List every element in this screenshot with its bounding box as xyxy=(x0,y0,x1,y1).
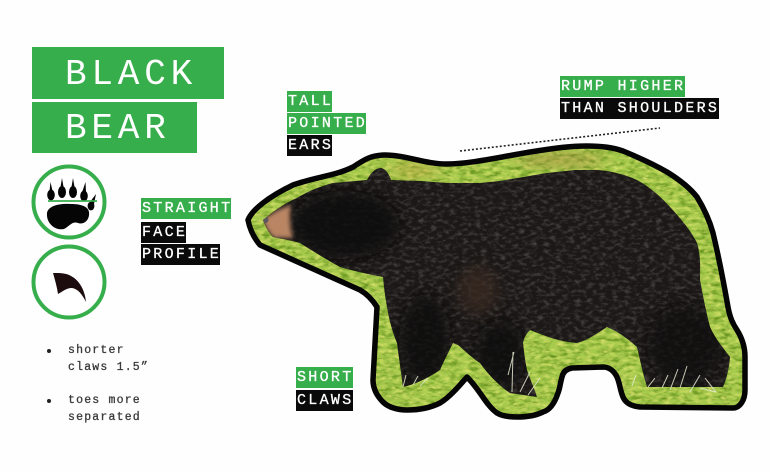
dotted rump line xyxy=(460,128,660,151)
label: short claws: SHORT xyxy=(297,369,354,386)
grass blades at paws xyxy=(403,352,716,395)
bullet: toes more separated: toes more xyxy=(68,394,141,407)
title: black xyxy=(32,47,224,99)
label: tall pointed ears: EARS xyxy=(288,137,333,154)
bear outline xyxy=(248,146,745,417)
bear body xyxy=(255,160,740,400)
bear illustration xyxy=(245,127,748,420)
label: straight face profile: STRAIGHT xyxy=(142,200,232,217)
label: tall pointed ears: TALL xyxy=(288,93,333,110)
bullet: shorter claws xyxy=(47,344,149,374)
title: bear: BEAR xyxy=(65,108,171,149)
icon: paw badge xyxy=(32,164,106,240)
label: straight face profile: FACE xyxy=(142,224,187,241)
title: black: BLACK xyxy=(65,54,197,95)
nose xyxy=(263,217,268,223)
grass background inside outline xyxy=(250,148,742,414)
muzzle xyxy=(263,205,293,238)
title: bear xyxy=(32,102,197,153)
label: straight face profile xyxy=(141,198,232,265)
label: rump higher than shoulders: RUMP HIGHER xyxy=(561,78,685,95)
label: short claws xyxy=(296,367,354,411)
bullet: shorter claws: claws 1.5” xyxy=(68,361,149,374)
label: tall pointed ears: POINTED xyxy=(288,115,367,132)
label: straight face profile: PROFILE xyxy=(142,246,221,263)
label: rump higher than shoulders xyxy=(560,76,719,119)
bullet: shorter claws: shorter xyxy=(68,344,125,357)
label: short claws: CLAWS xyxy=(297,392,354,409)
bullet: toes more separated xyxy=(47,394,141,424)
icon: claw badge xyxy=(32,244,106,320)
label: tall pointed ears xyxy=(287,91,367,156)
bullet: toes more separated: separated xyxy=(68,411,141,424)
label: rump higher than shoulders: THAN SHOULDERS xyxy=(561,100,719,117)
